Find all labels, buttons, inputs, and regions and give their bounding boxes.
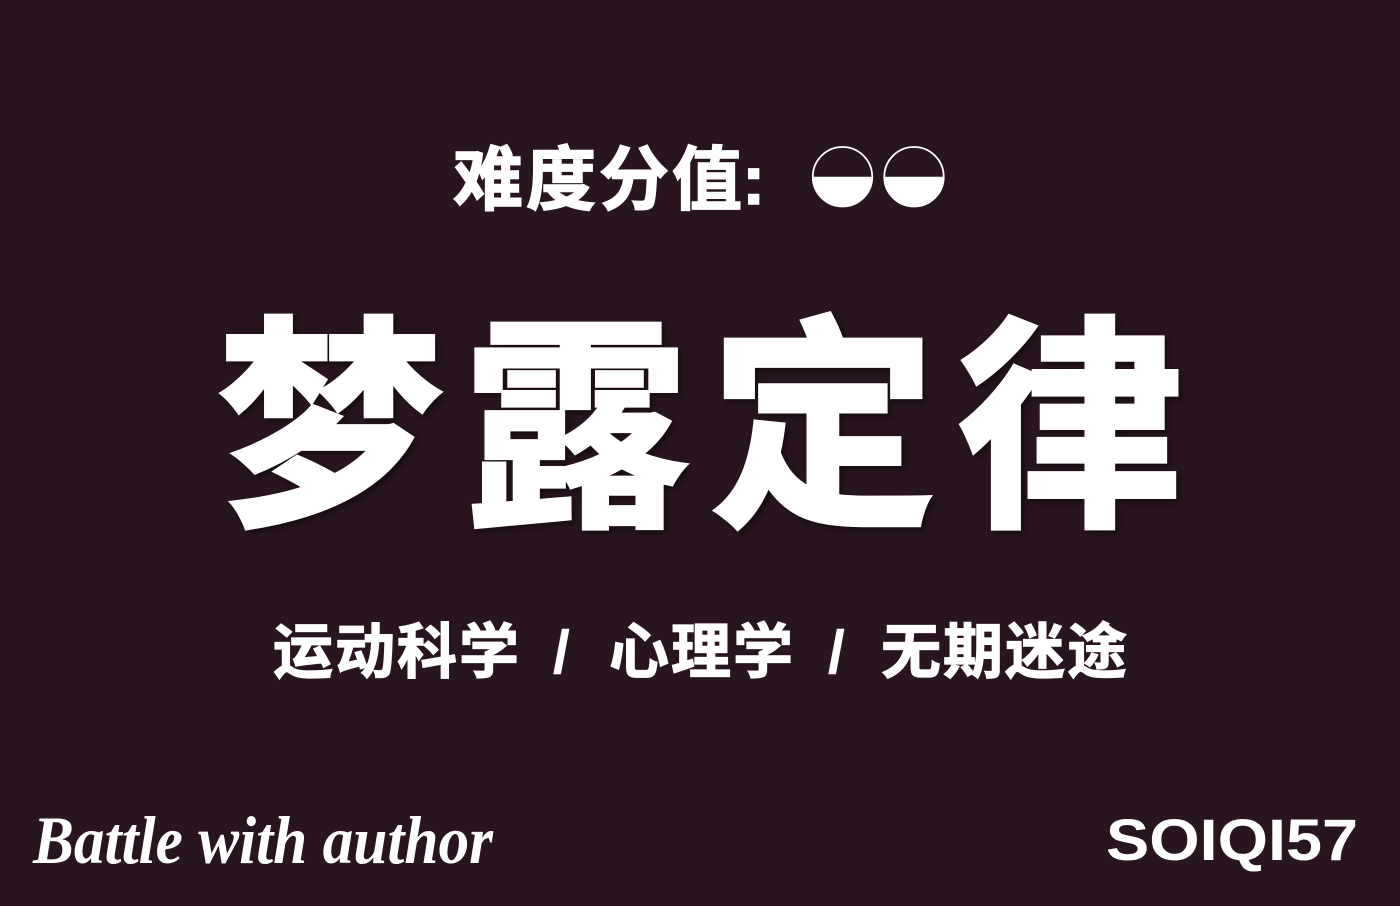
code: SOIQI57 <box>1106 808 1358 873</box>
category: game name: 无期迷途 <box>881 619 1127 686</box>
subtitle categories <box>273 619 1127 686</box>
author tagline: Battle with author <box>32 802 493 878</box>
main title: 梦露定律 <box>217 303 1183 556</box>
separator slash 2: / <box>828 619 845 686</box>
icon: difficulty half circle 1 <box>812 147 873 207</box>
category: psychology: 心理学 <box>609 619 793 686</box>
icon: difficulty half circle 2 <box>884 147 944 207</box>
separator slash 1: / <box>553 619 570 686</box>
category: sports science: 运动科学 <box>273 619 519 686</box>
difficulty score label: 难度分值: <box>453 141 765 219</box>
